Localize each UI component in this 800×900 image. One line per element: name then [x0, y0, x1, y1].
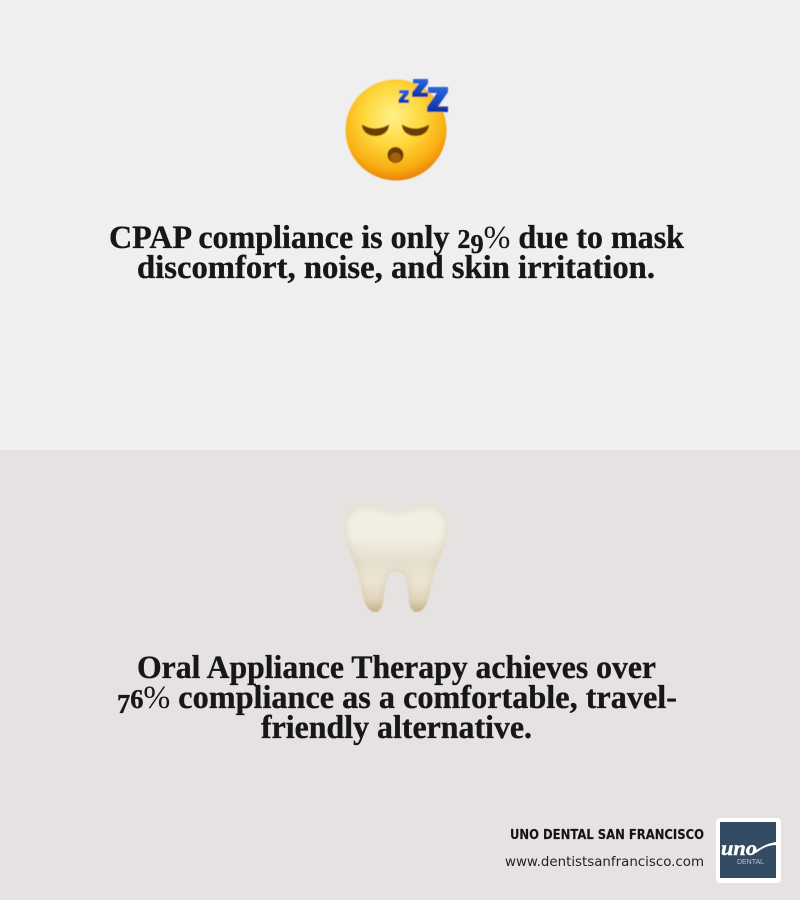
- heading: CPAP compliance statement: %: [484, 220, 510, 256]
- heading: CPAP compliance statement: discomfort, noise, and skin irritation.: [137, 250, 655, 286]
- panel: CPAP compliance: [0, 0, 800, 450]
- logo: Uno Dental: DENTAL: [737, 859, 764, 866]
- heading: oral appliance statement: Oral Appliance Therapy achieves over: [137, 650, 656, 686]
- heading: CPAP compliance statement: 9: [471, 229, 484, 259]
- heading: oral appliance statement: friendly alternative.: [261, 710, 532, 746]
- footer: clinic name and website: www.dentistsanfrancisco.com: [505, 854, 704, 870]
- footer: clinic name and website: [505, 828, 704, 870]
- heading: oral appliance statement: [117, 650, 677, 746]
- footer: clinic name and website: UNO DENTAL SAN FRANCISCO: [510, 828, 704, 843]
- heading: CPAP compliance statement: due to mask: [519, 220, 689, 256]
- logo: Uno Dental: uno: [721, 836, 757, 860]
- heading: oral appliance statement: % compliance as a comfortable, travel-: [143, 680, 689, 716]
- heading: CPAP compliance statement: [109, 220, 685, 286]
- logo: Uno Dental: [716, 818, 781, 883]
- icon: tooth: [344, 505, 448, 612]
- icon: sleeping face: [346, 79, 448, 180]
- panel: oral appliance therapy: [0, 450, 800, 900]
- heading: CPAP compliance statement: CPAP compliance is only 2: [109, 220, 471, 256]
- heading: oral appliance statement: 6: [130, 684, 143, 714]
- heading: oral appliance statement: 7: [117, 689, 130, 719]
